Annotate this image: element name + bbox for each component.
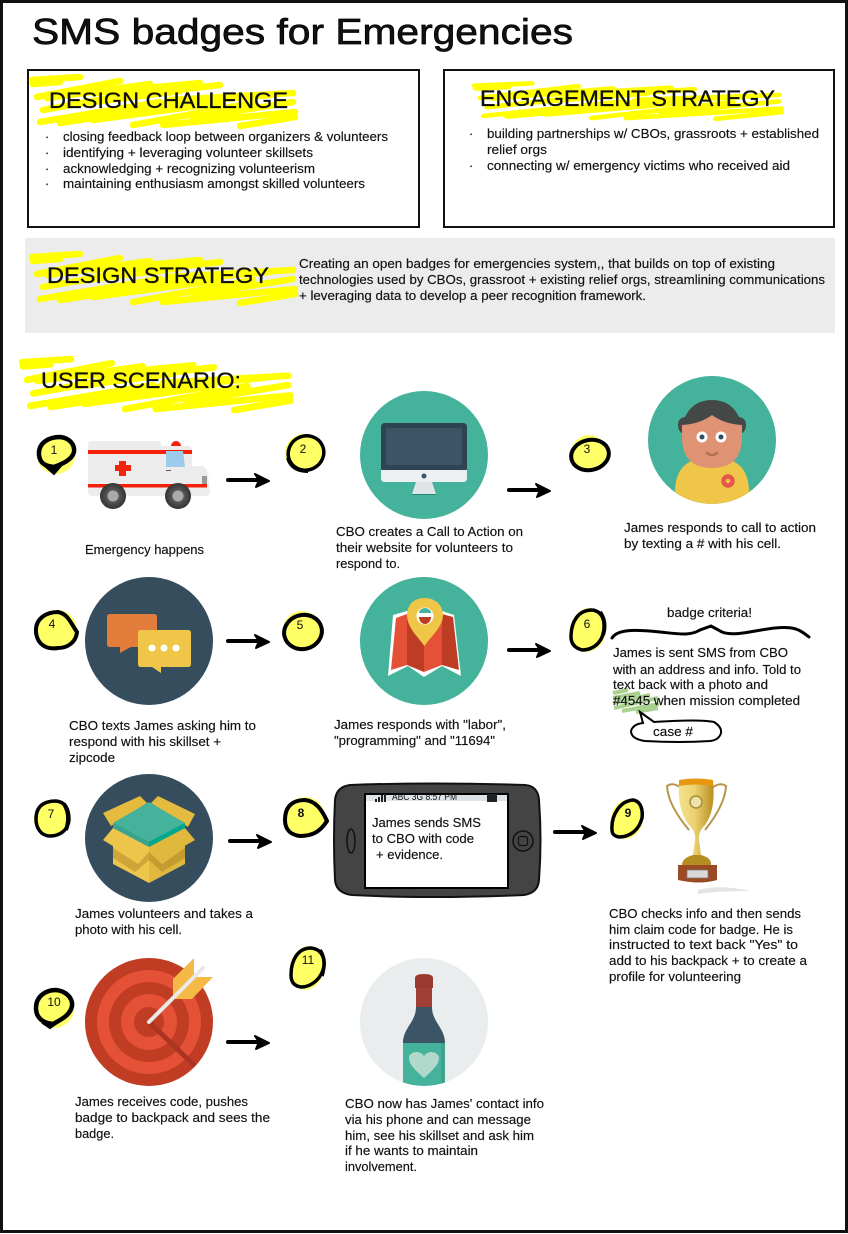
caption: James volunteers and takes a bbox=[75, 907, 253, 921]
step 3 bbox=[568, 376, 816, 551]
callout: case number bbox=[631, 712, 721, 742]
bullet list bbox=[469, 127, 819, 173]
description: James is sent SMS from CBO bbox=[613, 646, 788, 660]
caption: him, see his skillset and ask him bbox=[345, 1129, 534, 1143]
caption: James receives code, pushes bbox=[75, 1095, 248, 1109]
step 9 bbox=[606, 778, 807, 984]
bullet list: relief orgs bbox=[487, 143, 547, 157]
caption bbox=[69, 719, 256, 765]
heading: design strategy: DESIGN STRATEGY bbox=[47, 263, 269, 288]
caption bbox=[345, 1097, 544, 1174]
number badge 9 bbox=[606, 796, 648, 842]
bullet list: · bbox=[469, 127, 473, 141]
icon: desktop monitor bbox=[360, 391, 488, 519]
step 6 bbox=[566, 605, 809, 742]
caption: photo with his cell. bbox=[75, 923, 182, 937]
SMS text: James sends SMS bbox=[372, 816, 481, 830]
icon: map with pin bbox=[360, 577, 488, 705]
arrow bbox=[509, 484, 550, 497]
step 2 bbox=[283, 391, 550, 571]
bullet list: building partnerships w/ CBOs, grassroots + established bbox=[487, 127, 819, 141]
number badge 7 bbox=[34, 801, 70, 837]
caption: zipcode bbox=[69, 751, 115, 765]
bullet list: identifying + leveraging volunteer skillsets bbox=[63, 146, 313, 160]
callout: case number: case # bbox=[653, 725, 693, 739]
caption: badge to backpack and sees the bbox=[75, 1111, 270, 1125]
caption bbox=[609, 907, 807, 984]
caption: add to his backpack + to create a bbox=[609, 954, 807, 968]
description bbox=[612, 646, 801, 708]
number badge 3 bbox=[568, 435, 612, 474]
icon: ambulance bbox=[88, 441, 210, 509]
bullet list: connecting w/ emergency victims who received aid bbox=[487, 159, 790, 173]
number badge 7: 7 bbox=[48, 807, 55, 821]
caption: by texting a # with his cell. bbox=[624, 537, 781, 551]
caption: CBO creates a Call to Action on bbox=[336, 525, 523, 539]
phone status bar bbox=[366, 794, 507, 802]
caption: CBO now has James' contact info bbox=[345, 1097, 544, 1111]
section heading: user scenario bbox=[22, 359, 290, 410]
step 8 bbox=[285, 784, 596, 897]
number badge 11: 11 bbox=[302, 953, 315, 967]
number badge 3: 3 bbox=[584, 442, 591, 456]
panel: engagement strategy bbox=[444, 70, 834, 227]
caption: James responds to call to action bbox=[624, 521, 816, 535]
number badge 5 bbox=[280, 611, 326, 653]
bullet list: maintaining enthusiasm amongst skilled volunteers bbox=[63, 177, 365, 191]
number badge 1 bbox=[37, 436, 75, 474]
caption bbox=[75, 1095, 270, 1141]
panel: design challenge bbox=[28, 70, 419, 227]
number badge 10 bbox=[34, 988, 74, 1028]
number badge 1: 1 bbox=[51, 443, 58, 457]
panel: design strategy bbox=[25, 238, 835, 333]
step 10 bbox=[34, 958, 270, 1141]
number badge 4: 4 bbox=[49, 617, 56, 631]
step 11 bbox=[286, 943, 544, 1174]
number badge 2: 2 bbox=[300, 442, 307, 456]
SMS text: + evidence. bbox=[376, 848, 443, 862]
bullet list bbox=[45, 130, 388, 191]
arrow bbox=[228, 474, 269, 487]
caption: respond to. bbox=[336, 557, 400, 571]
callout: badge criteria brace: badge criteria! bbox=[667, 606, 752, 620]
number badge 8 bbox=[285, 797, 327, 837]
step 1 bbox=[37, 436, 269, 557]
caption: respond with his skillset + bbox=[69, 735, 221, 749]
icon: chat bubbles bbox=[85, 577, 213, 705]
caption: Emergency happens bbox=[85, 543, 204, 557]
step 7 bbox=[34, 774, 271, 937]
SMS text bbox=[372, 816, 481, 862]
caption: involvement. bbox=[345, 1160, 417, 1174]
bullet list: · bbox=[45, 162, 49, 176]
SMS text: to CBO with code bbox=[372, 832, 474, 846]
caption: profile for volunteering bbox=[609, 970, 741, 984]
caption bbox=[624, 521, 816, 551]
caption: CBO texts James asking him to bbox=[69, 719, 256, 733]
section heading: user scenario: USER SCENARIO: bbox=[41, 368, 241, 393]
caption: if he wants to maintain bbox=[345, 1144, 478, 1158]
number badge 6: 6 bbox=[584, 617, 591, 631]
bullet list: · bbox=[45, 130, 49, 144]
description: #4545 when mission completed bbox=[613, 694, 800, 708]
icon: bottle bbox=[360, 958, 488, 1087]
title: SMS badges for Emergencies bbox=[32, 11, 573, 52]
step 4 bbox=[36, 577, 269, 765]
caption: badge. bbox=[75, 1127, 114, 1141]
number badge 2 bbox=[283, 430, 329, 476]
caption: instructed to text back "Yes" to bbox=[609, 938, 798, 952]
arrow bbox=[555, 826, 596, 839]
phone status bar: ABC 3G 8:57 PM bbox=[392, 792, 457, 803]
number badge 10: 10 bbox=[47, 995, 61, 1009]
icon: target with arrow bbox=[85, 958, 213, 1086]
highlight scribble bbox=[32, 77, 295, 126]
description: + leveraging data to develop a peer recognition framework. bbox=[299, 289, 646, 303]
icon: phone with SMS bbox=[334, 784, 540, 897]
number badge 6 bbox=[566, 605, 610, 655]
caption bbox=[75, 907, 253, 937]
highlight scribble bbox=[475, 83, 780, 119]
icon: open box bbox=[85, 774, 213, 902]
caption bbox=[334, 718, 506, 748]
description: Creating an open badges for emergencies system,, that builds on top of existing bbox=[299, 257, 775, 271]
arrow bbox=[228, 635, 269, 648]
bullet list: · bbox=[45, 146, 49, 160]
arrow bbox=[509, 644, 550, 657]
description: with an address and info. Told to bbox=[612, 663, 801, 677]
number badge 5: 5 bbox=[297, 618, 304, 632]
description: text back with a photo and bbox=[613, 678, 768, 692]
icon: person bbox=[648, 376, 776, 504]
number badge 8: 8 bbox=[298, 806, 305, 820]
bullet list: acknowledging + recognizing volunteerism bbox=[63, 162, 315, 176]
caption: "programming" and "11694" bbox=[334, 734, 495, 748]
step 5 bbox=[280, 577, 550, 748]
number badge 11 bbox=[286, 943, 328, 993]
heading: design challenge: DESIGN CHALLENGE bbox=[49, 88, 288, 113]
number badge 4 bbox=[36, 610, 77, 650]
bullet list: · bbox=[45, 177, 49, 191]
highlight: case number bbox=[613, 690, 659, 712]
highlight scribble bbox=[32, 254, 295, 303]
description bbox=[299, 257, 825, 303]
bullet list: · bbox=[469, 159, 473, 173]
caption: James responds with "labor", bbox=[334, 718, 506, 732]
caption: him claim code for badge. He is bbox=[609, 923, 793, 937]
caption bbox=[336, 525, 523, 571]
icon: trophy bbox=[667, 778, 750, 894]
caption: CBO checks info and then sends bbox=[609, 907, 801, 921]
callout: badge criteria brace bbox=[612, 606, 809, 638]
caption: via his phone and can message bbox=[345, 1113, 531, 1127]
bullet list: closing feedback loop between organizers & volunteers bbox=[63, 130, 388, 144]
arrow bbox=[228, 1036, 269, 1049]
arrow bbox=[230, 835, 271, 848]
heading: engagement strategy: ENGAGEMENT STRATEGY bbox=[480, 86, 775, 111]
description: technologies used by CBOs, grassroot + existing relief orgs, streamlining communications bbox=[299, 273, 825, 287]
caption: their website for volunteers to bbox=[336, 541, 513, 555]
number badge 9: 9 bbox=[625, 806, 632, 820]
